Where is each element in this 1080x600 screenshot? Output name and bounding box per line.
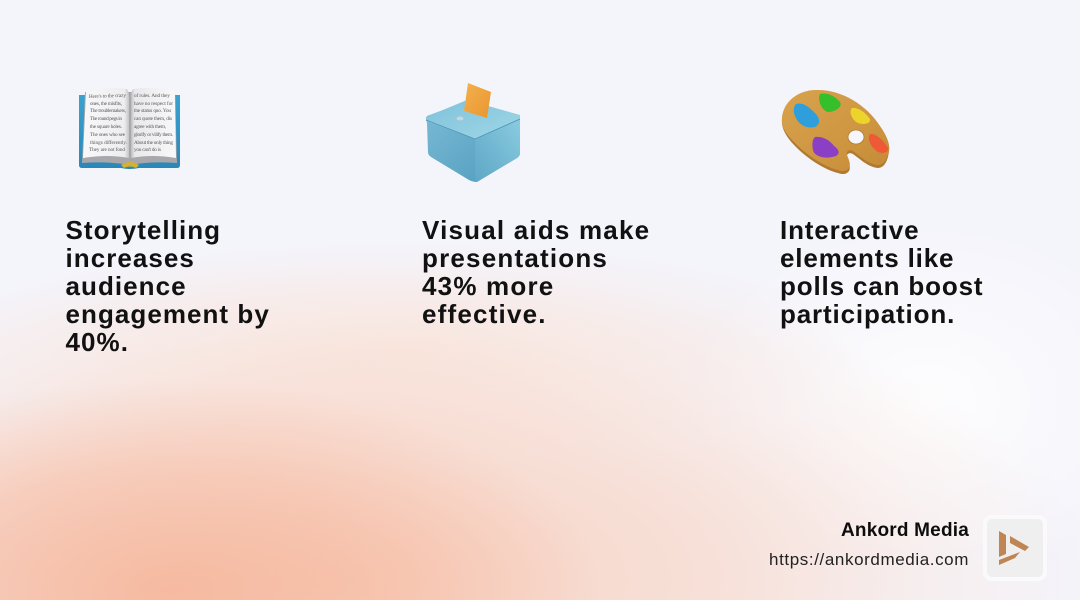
icon: open book: About the only thing <box>134 140 173 146</box>
icon: open book: the status quo. You <box>134 108 171 114</box>
fact: visual aids: presentations <box>422 243 608 273</box>
icon: open book: the square holes. <box>90 124 122 130</box>
paint: blue <box>794 104 819 128</box>
icon: open book: ones, the misfits, <box>90 100 122 107</box>
fact: interactive elements: participation. <box>780 299 955 329</box>
fact: visual aids: effective. <box>422 299 547 329</box>
fact: storytelling: increases <box>66 243 195 273</box>
fact: storytelling: engagement by <box>66 299 270 329</box>
icon: open book <box>79 88 180 169</box>
fact: interactive elements: Interactive <box>780 215 919 245</box>
fact: interactive elements: elements like <box>780 243 954 273</box>
icon: open book: have no respect for <box>134 100 173 107</box>
icon: open book: things differently. <box>90 139 127 146</box>
fact: storytelling <box>66 215 270 357</box>
icon: open book: glorify or vilify them. <box>134 131 173 138</box>
fact: storytelling: Storytelling <box>66 215 221 245</box>
icon: open book: The round pegs in <box>90 116 122 122</box>
icon: open book: The ones who see <box>90 132 126 138</box>
fact: visual aids: Visual aids make <box>422 215 650 245</box>
icon: open book: Here's to the crazy <box>89 93 126 100</box>
fact: interactive elements: polls can boost <box>780 271 983 301</box>
icon: artist palette <box>782 90 890 174</box>
logo <box>983 519 1043 581</box>
fact: interactive elements <box>780 215 983 329</box>
brand name: Ankord Media <box>841 520 969 541</box>
icon: open book: you can't do is <box>134 147 161 153</box>
icon: open book: They are not fond <box>89 146 125 153</box>
icon: ballot box <box>426 83 520 182</box>
fact: storytelling: audience <box>66 271 187 301</box>
fact: visual aids: 43% more <box>422 271 554 301</box>
paint: purple <box>812 137 839 158</box>
icon: open book: can quote them, dis <box>134 116 172 122</box>
palette board <box>782 90 889 171</box>
palette hole <box>848 130 864 144</box>
paint: yellow <box>851 108 870 124</box>
fact: storytelling: 40%. <box>66 327 129 357</box>
icon: open book: agree with them, <box>134 124 166 130</box>
paint: red <box>869 134 888 153</box>
paint: green <box>819 93 841 112</box>
icon: open book: of rules. And they <box>134 92 170 99</box>
icon: open book: The troublemakers, <box>90 108 126 114</box>
brand url: https://ankordmedia.com <box>769 550 969 569</box>
palette board edge <box>782 91 889 174</box>
fact: visual aids <box>422 215 650 329</box>
